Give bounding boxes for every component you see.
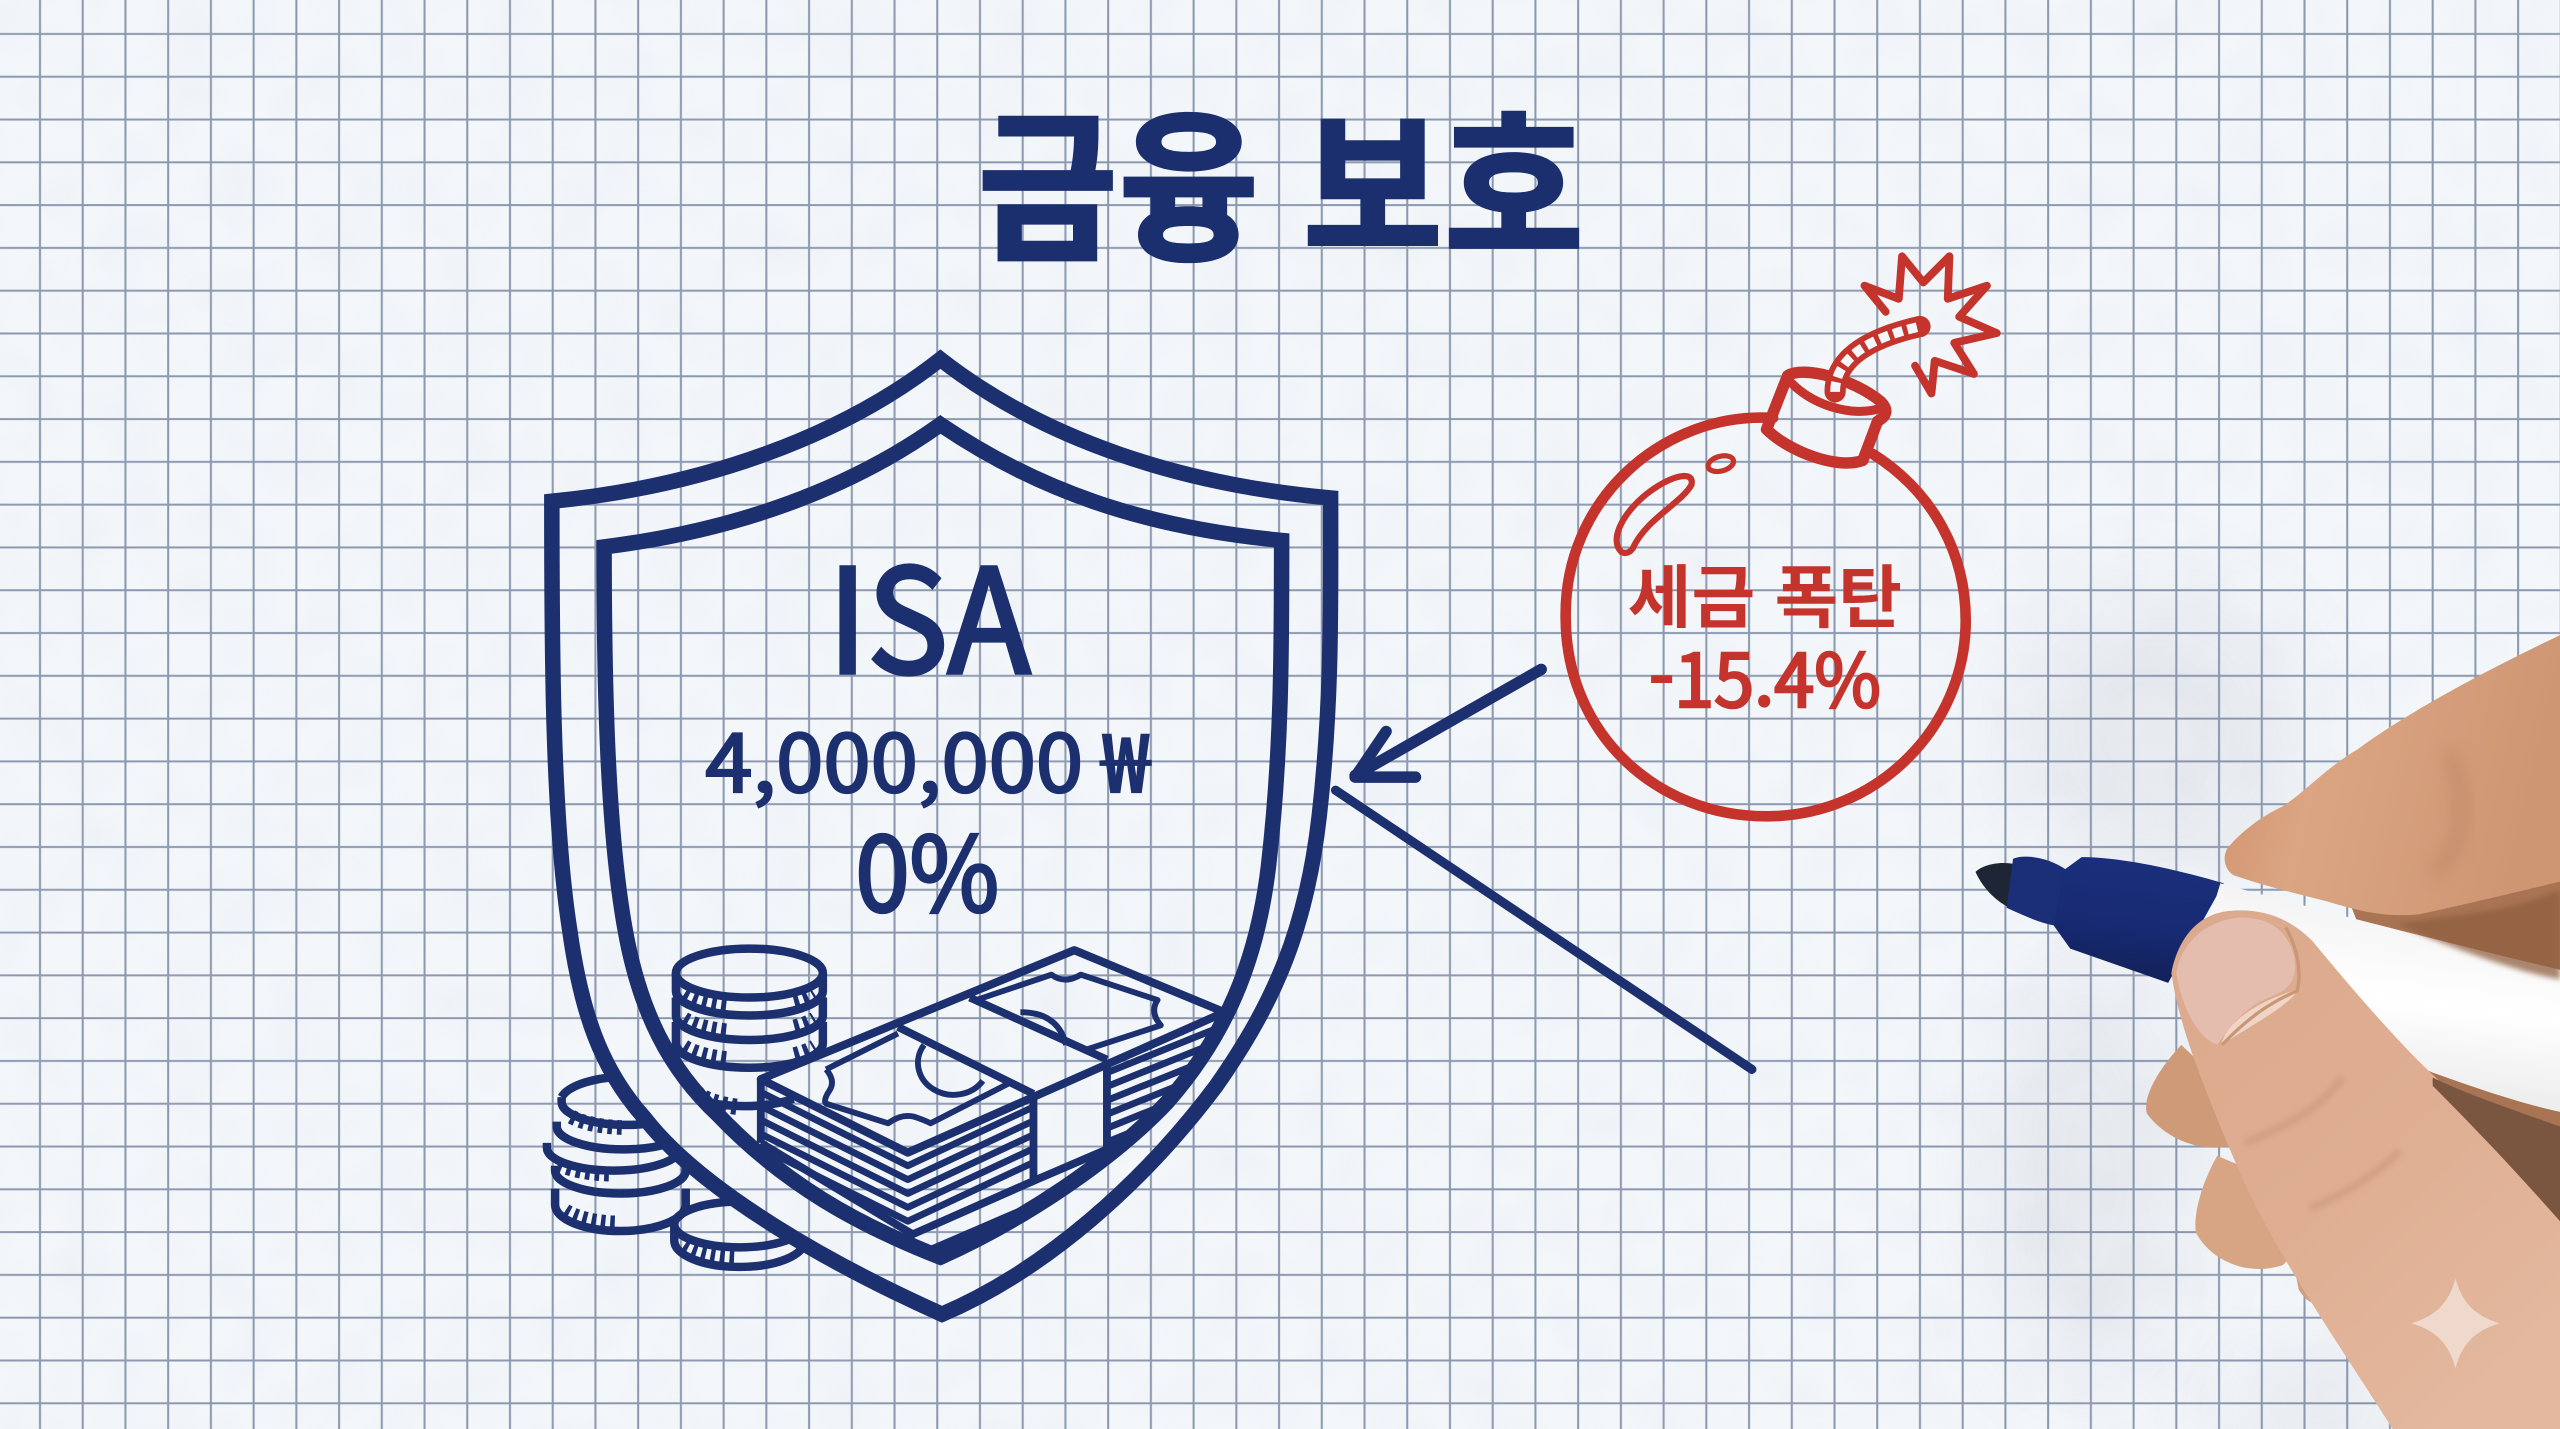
arrow pointing at the shield — [1355, 669, 1541, 777]
marker line drawn from the shield — [1336, 790, 1752, 1069]
shield heading: ISA: ISA — [828, 507, 1030, 715]
back of the hand in shadow — [2352, 882, 2560, 1126]
little finger — [2296, 1278, 2312, 1303]
bomb label: 세금 폭탄 — [1628, 542, 1902, 642]
shield rate: 0% — [856, 792, 999, 941]
shield amount: 4,000,000 ₩ — [705, 700, 1151, 816]
thumb — [2171, 910, 2560, 1429]
icon: red bomb — [1566, 256, 1997, 816]
index finger — [2225, 635, 2560, 915]
ring finger — [2195, 1156, 2286, 1269]
illustration: coins behind the shield — [547, 1077, 805, 1267]
shading where fingers meet — [2433, 751, 2461, 873]
knuckle creases — [2245, 1078, 2400, 1208]
thumbnail — [2176, 918, 2295, 1045]
middle finger — [2146, 1045, 2230, 1148]
watermark sparkle — [2411, 1278, 2500, 1368]
title: 금융 보호 — [977, 59, 1584, 295]
bomb value: -15.4% — [1649, 623, 1881, 729]
illustration: coin stack inside the shield — [676, 949, 823, 1107]
marker white body — [2196, 883, 2560, 1112]
marker tip and cap — [1976, 857, 2224, 983]
shield outer outline — [552, 359, 1331, 1314]
illustration: stacks of banknotes — [761, 950, 1224, 1257]
hand holding a marker — [1976, 635, 2560, 1429]
shield inner outline — [604, 424, 1282, 1257]
